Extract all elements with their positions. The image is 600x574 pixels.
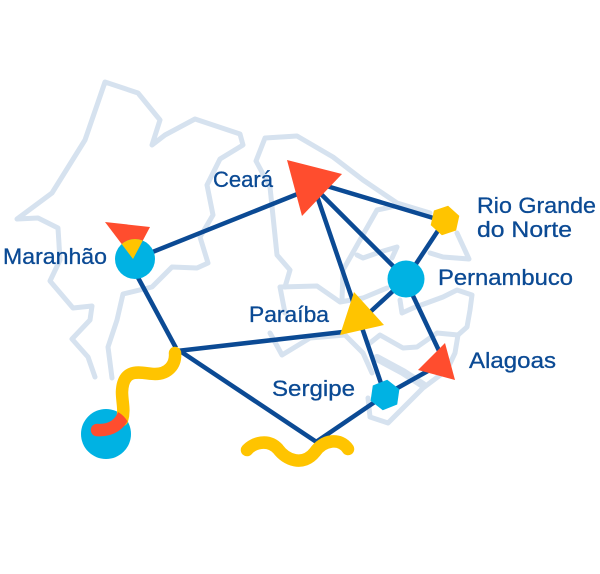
network connection lines bbox=[135, 186, 445, 443]
node: Ceará triangle bbox=[287, 160, 342, 216]
map: Rio Grande do Norte outline bbox=[342, 205, 469, 300]
label: Rio Grande do Norte: do Norte bbox=[477, 217, 572, 242]
node: wave squiggle bbox=[247, 441, 348, 461]
map: Pernambuco outline bbox=[270, 286, 472, 373]
map: Alagoas and Sergipe outline bbox=[368, 335, 458, 423]
label: Maranhão: Maranhão bbox=[3, 244, 107, 269]
node: Maranhão bbox=[105, 222, 155, 279]
node: Alagoas triangle bbox=[418, 343, 455, 380]
label: Paraíba: Paraíba bbox=[249, 302, 330, 327]
label: Pernambuco: Pernambuco bbox=[438, 265, 573, 290]
label: Rio Grande do Norte: Rio Grande bbox=[477, 193, 596, 218]
node: curved squiggle with circle bbox=[81, 353, 175, 459]
map: Ceará outline bbox=[256, 136, 430, 287]
node: Pernambuco circle bbox=[388, 260, 424, 298]
background map of the Northeast states bbox=[17, 82, 472, 423]
label: Alagoas: Alagoas bbox=[469, 348, 556, 373]
label: Ceará: Ceará bbox=[213, 167, 274, 192]
node: Sergipe hexagon bbox=[371, 380, 399, 410]
node: Rio Grande do Norte hexagon bbox=[431, 206, 459, 235]
node: Paraíba triangle bbox=[340, 292, 384, 335]
label: Sergipe: Sergipe bbox=[272, 376, 355, 401]
map: Maranhão outline bbox=[17, 82, 243, 378]
label: Rio Grande do Norte bbox=[477, 193, 596, 242]
